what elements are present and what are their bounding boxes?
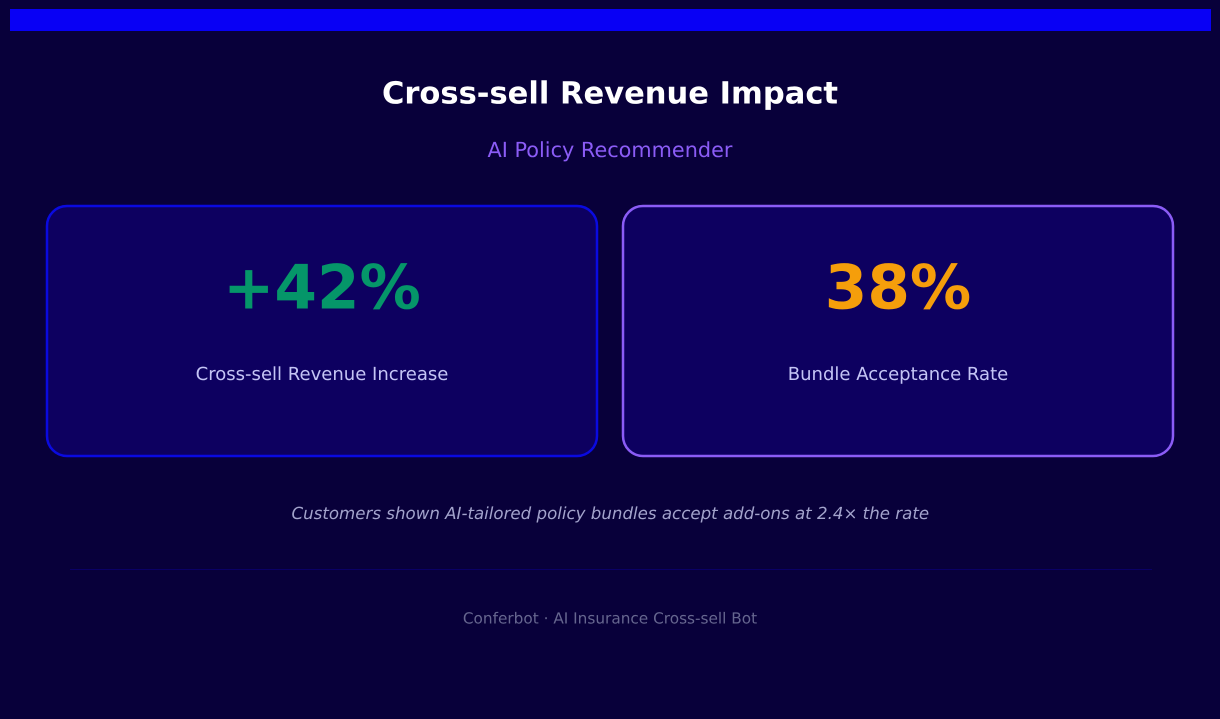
label: acceptance rate: Bundle Acceptance Rate: [788, 364, 1008, 385]
stat: +42%: +42%: [223, 252, 421, 324]
top accent bar: [10, 9, 1211, 31]
footer: Conferbot · AI Insurance Cross-sell Bot: [463, 610, 757, 628]
panel: cross-sell revenue: [47, 206, 597, 456]
stat: 38%: 38%: [825, 252, 971, 324]
label: revenue increase: Cross-sell Revenue Increase: [196, 364, 448, 385]
subtitle: AI Policy Recommender: [488, 138, 733, 162]
title: Cross-sell Revenue Impact: [382, 76, 838, 111]
insight note: Customers shown AI-tailored policy bundles accept add-ons at 2.4× the rate: [292, 504, 929, 523]
panel: bundle acceptance: [623, 206, 1173, 456]
